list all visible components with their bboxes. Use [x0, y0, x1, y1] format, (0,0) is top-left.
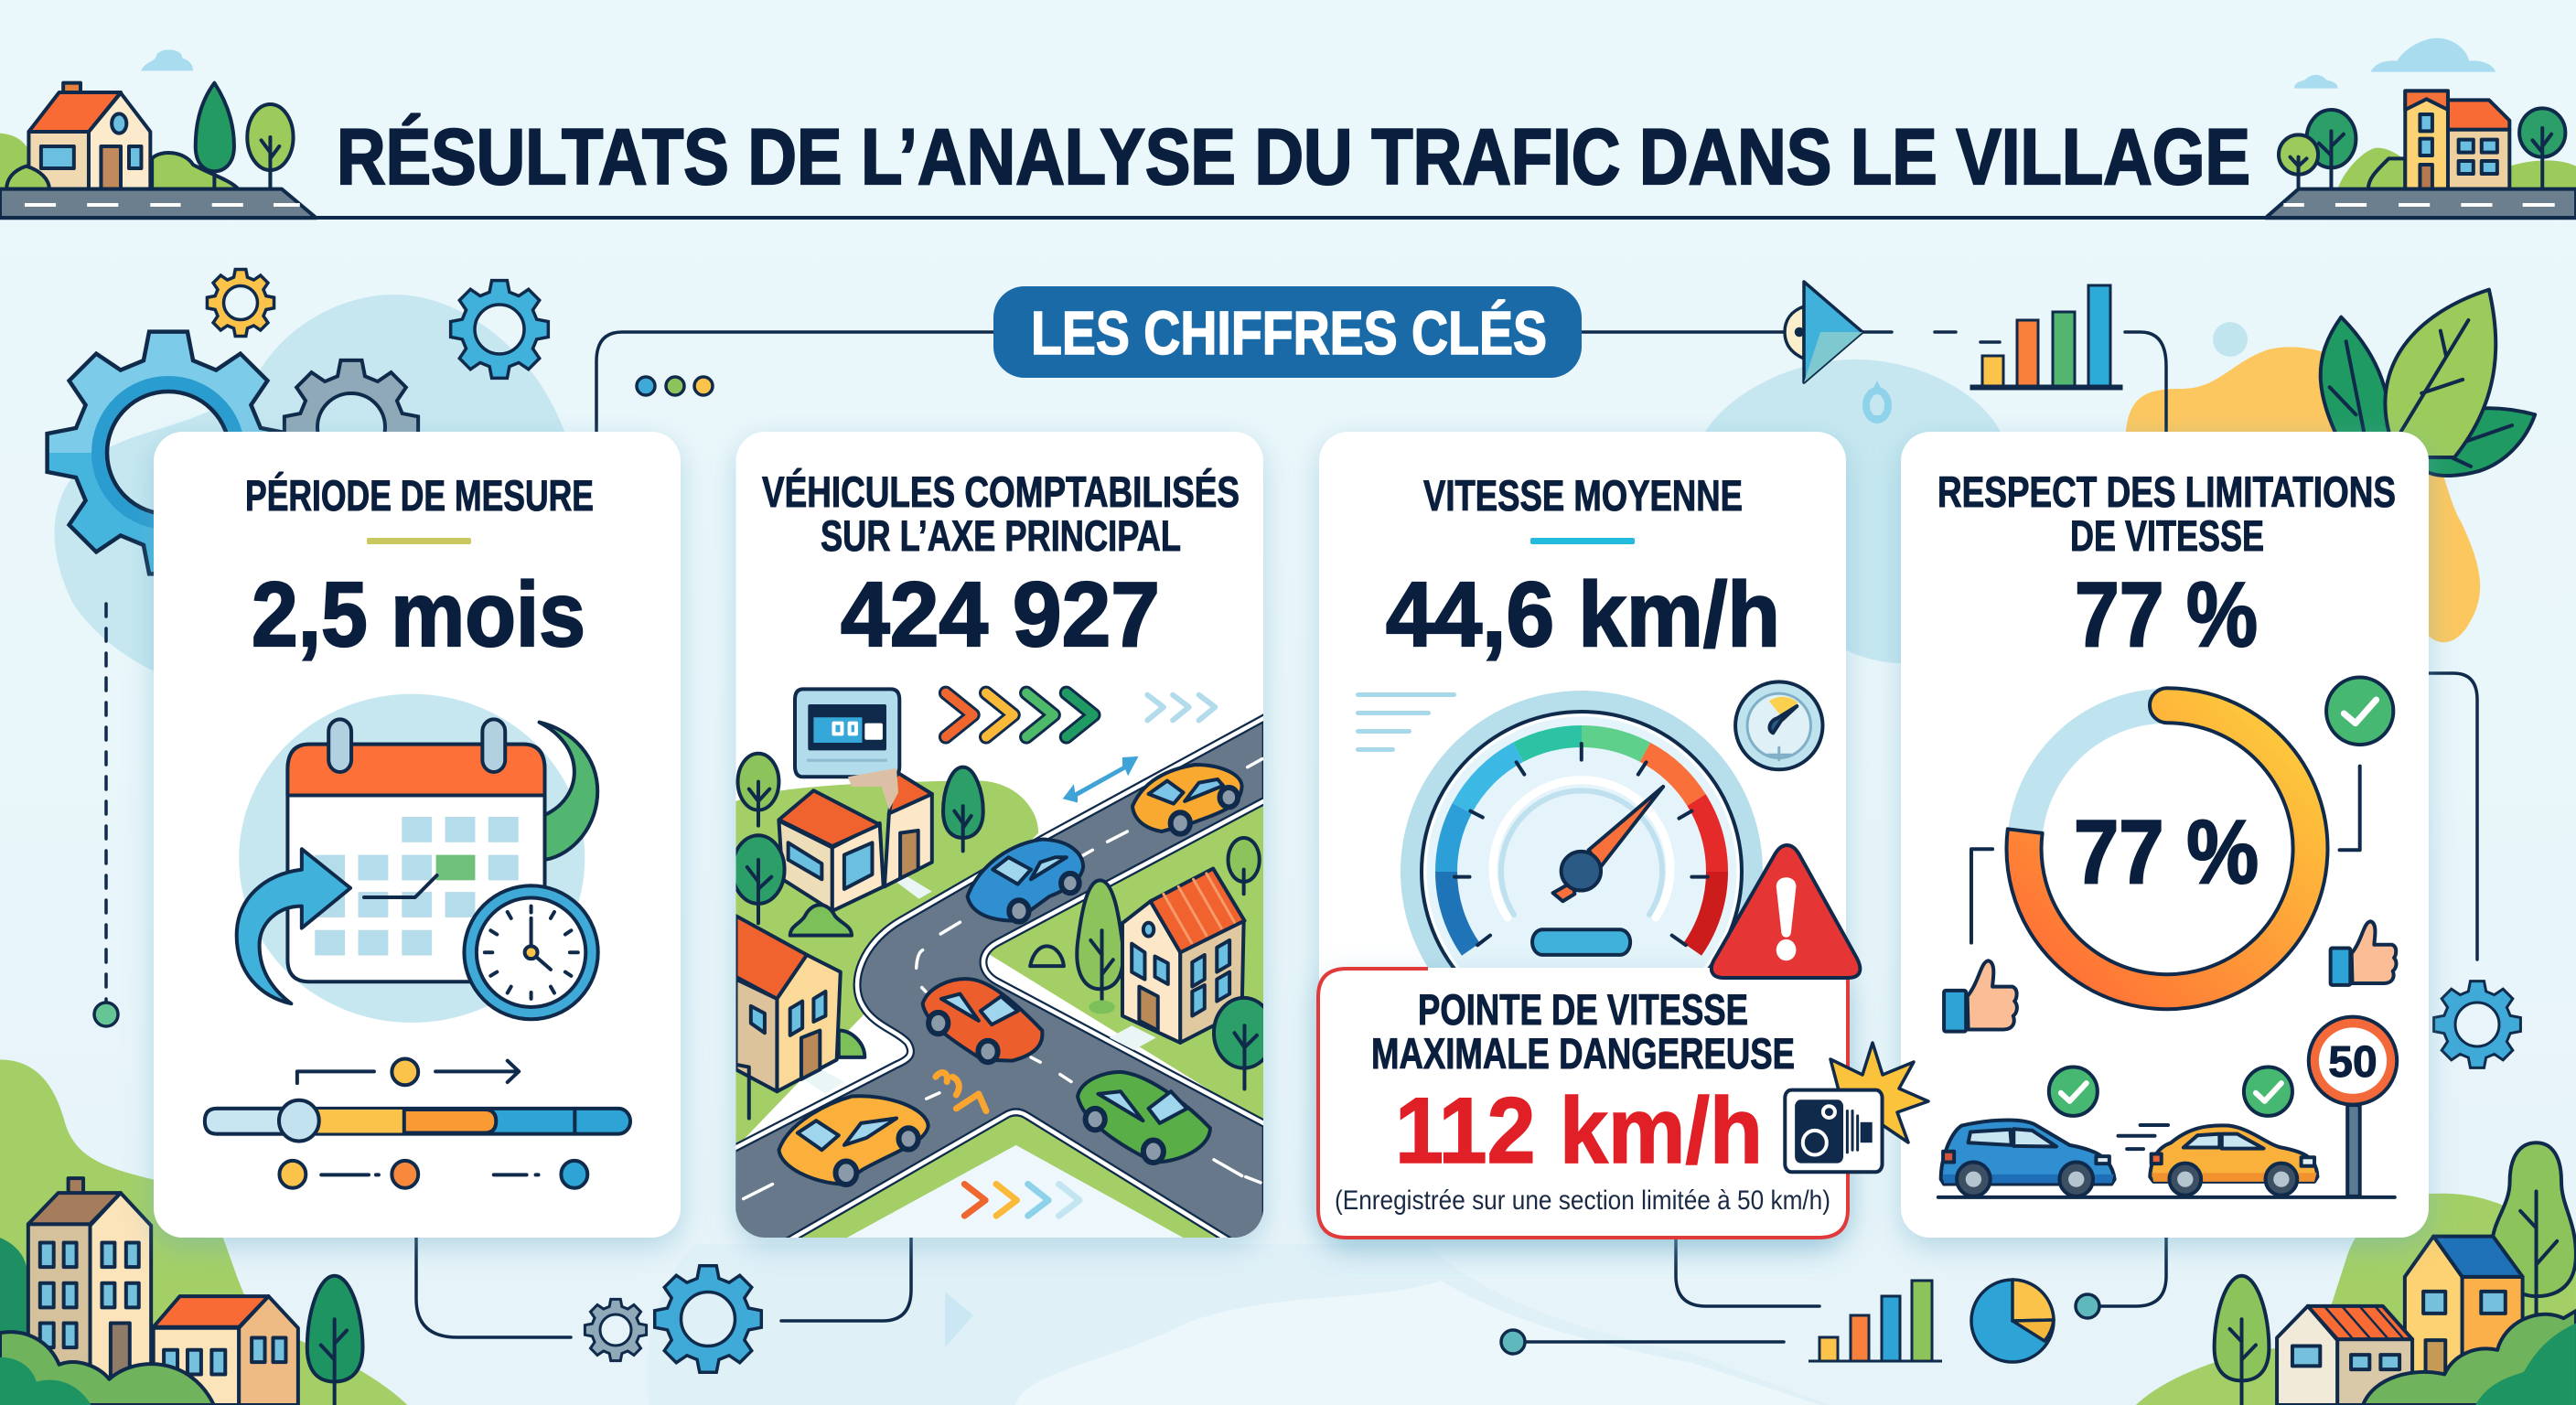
title: RÉSULTATS DE L’ANALYSE DU TRAFIC DANS LE VILLAGE — [337, 113, 2250, 201]
chevrons — [946, 693, 1215, 803]
icon: warning triangle — [1712, 845, 1860, 978]
arrow marker — [1785, 282, 1862, 382]
panel: respect des limitations — [1901, 432, 2429, 1238]
panel: période de mesure — [154, 432, 681, 1238]
right gear — [2434, 981, 2520, 1067]
village bottom right — [2136, 1142, 2576, 1405]
timeline — [205, 1058, 630, 1188]
gauge ticks and needle — [1454, 744, 1708, 955]
decorative gears top left — [48, 269, 548, 574]
decorative lines — [1356, 692, 1456, 752]
icon: speed camera with flash — [1785, 1043, 1928, 1172]
road scene illustration — [732, 717, 1273, 1245]
panel: vitesse moyenne — [1319, 432, 1846, 1238]
gears bottom — [585, 1266, 761, 1372]
callout: pointe de vitesse maximale — [1317, 968, 1849, 1238]
small bar chart top — [1971, 285, 2121, 389]
heading: respect des limitations: RESPECT DES LIMITATIONS — [1937, 467, 2396, 516]
accent underline — [1530, 538, 1635, 544]
heading: véhicules comptabilisés — [762, 467, 1240, 560]
header village left — [0, 49, 317, 218]
speedometer gauge — [1401, 691, 1763, 1053]
value: 44,6 km/h: 44,6 km/h — [1386, 563, 1780, 666]
heading: respect des limitations: DE VITESSE — [2070, 511, 2264, 560]
callout heading — [1371, 985, 1795, 1078]
callout heading: POINTE DE VITESSE — [1418, 985, 1748, 1034]
connector lines — [106, 332, 2477, 1342]
speed limit sign 50: 50 — [2328, 1038, 2377, 1087]
connector end dots — [94, 377, 2099, 1354]
donut chart 77% — [2006, 688, 2327, 1009]
heading: respect des limitations — [1937, 467, 2396, 560]
value: 77 %: 77 % — [2075, 563, 2258, 666]
small arrow watermark — [945, 1292, 973, 1347]
small bar chart bottom — [1809, 1281, 1942, 1361]
value: 112 km/h: 112 km/h — [1395, 1078, 1763, 1183]
background blobs — [55, 295, 2480, 1405]
cars on road — [1938, 1067, 2395, 1197]
heading: période de mesure: PÉRIODE DE MESURE — [245, 471, 594, 520]
donut centre value: 77 % — [2074, 801, 2259, 902]
heading: véhicules comptabilisés: SUR L’AXE PRINCIPAL — [821, 511, 1181, 560]
light gear in blob — [1866, 381, 1888, 424]
callout note: (Enregistrée sur une section limitée à 50 km/h) — [1335, 1185, 1830, 1216]
panel: véhicules comptabilisés — [732, 432, 1273, 1245]
mini gauge icon — [1735, 681, 1822, 769]
icon: calendar and clock — [237, 694, 598, 1023]
village bottom left — [0, 1060, 407, 1405]
accent underline — [367, 538, 471, 544]
callout heading: MAXIMALE DANGEREUSE — [1371, 1029, 1795, 1078]
icon: thumbs up left — [1944, 960, 2017, 1032]
header village right — [2266, 38, 2576, 218]
heading: vitesse moyenne: VITESSE MOYENNE — [1423, 471, 1743, 520]
decorative leaves — [2321, 290, 2535, 476]
heading pill: les chiffres clés: LES CHIFFRES CLÉS — [1031, 299, 1547, 368]
icon: thumbs up right — [2331, 921, 2396, 985]
pie chart — [1971, 1280, 2054, 1362]
value: 424 927: 424 927 — [841, 563, 1160, 666]
value: 2,5 mois: 2,5 mois — [252, 563, 585, 666]
check icon and brackets — [1971, 678, 2393, 943]
counter sign — [795, 689, 899, 810]
heading pill: les chiffres clés — [993, 286, 1582, 378]
heading: véhicules comptabilisés: VÉHICULES COMPTABILISÉS — [762, 467, 1240, 516]
header rule — [0, 216, 2576, 220]
speed limit sign 50 — [2309, 1017, 2397, 1196]
